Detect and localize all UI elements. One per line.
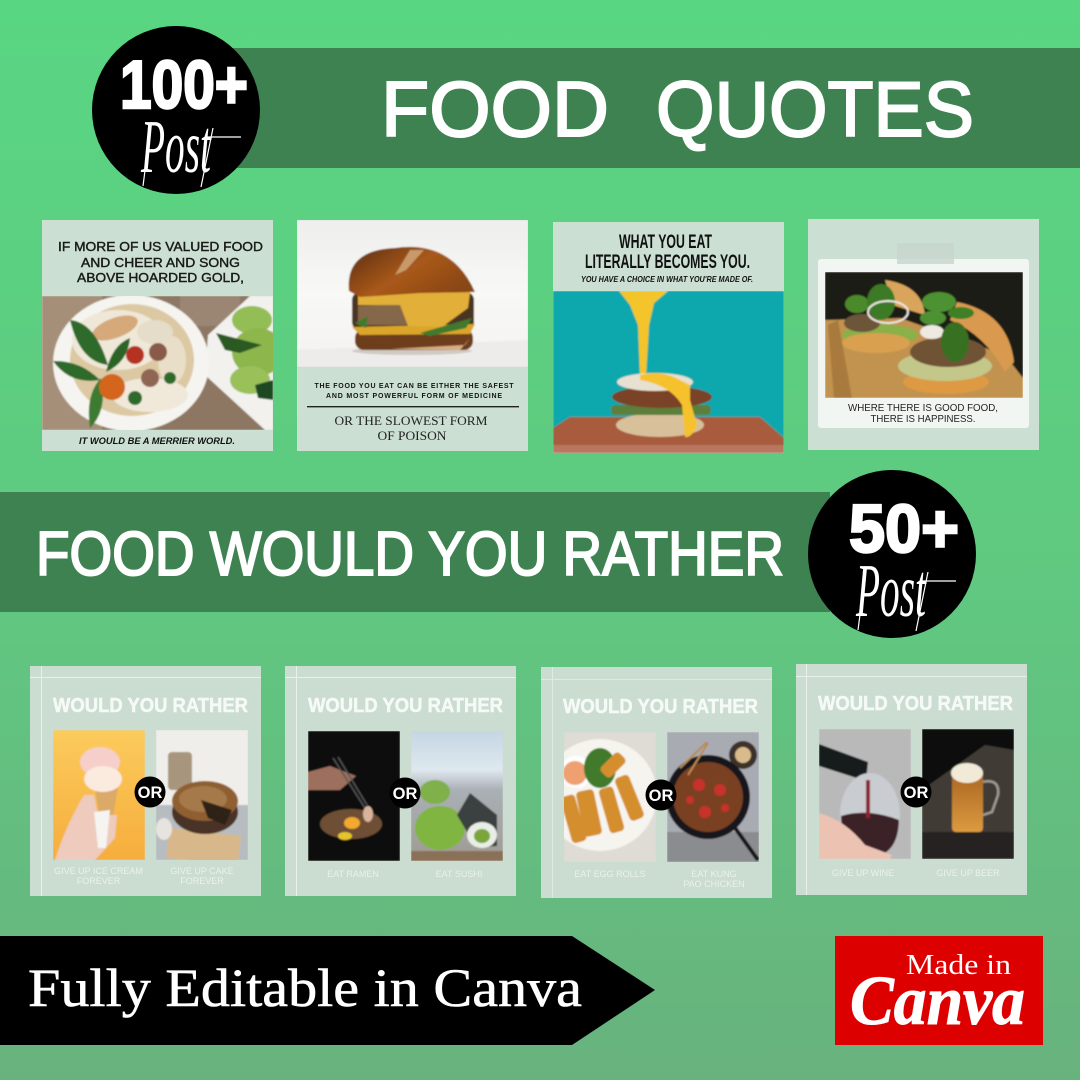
- or badge: OR: [138, 784, 162, 802]
- quote text: AND CHEER AND SONG: [81, 255, 240, 270]
- labels: EAT SUSHI: [436, 869, 482, 879]
- heading: WOULD YOU RATHER: [308, 695, 504, 717]
- photo: beer: [922, 729, 1014, 859]
- badge: 50+ post: Post: [855, 550, 927, 634]
- heading: WOULD YOU RATHER: [818, 693, 1014, 715]
- caption: IT WOULD BE A MERRIER WORLD.: [79, 436, 235, 447]
- caption: THERE IS HAPPINESS.: [870, 413, 976, 425]
- photo: burger on board: [553, 291, 784, 453]
- quote text: ABOVE HOARDED GOLD,: [77, 270, 244, 285]
- heading: WOULD YOU RATHER: [563, 696, 759, 718]
- or badge: OR: [904, 784, 928, 802]
- panel: quote card polaroid: [808, 219, 1039, 450]
- panel: quote card soup: [42, 220, 284, 451]
- labels: EAT EGG ROLLS: [574, 869, 646, 879]
- quote heading: LITERALLY BECOMES YOU.: [585, 252, 750, 273]
- photo: ice cream: [53, 730, 145, 860]
- photo: ramen: [308, 731, 400, 861]
- labels: GIVE UP ICE CREAM: [54, 866, 143, 876]
- labels: [574, 869, 745, 889]
- photo: egg rolls: [564, 732, 656, 862]
- title: food quotes: [381, 65, 974, 153]
- or badge: OR: [649, 787, 673, 805]
- quote heading: WHAT YOU EAT: [619, 232, 712, 253]
- polaroid frame: [818, 259, 1029, 428]
- caption: WHERE THERE IS GOOD FOOD,: [848, 402, 998, 414]
- arrow banner: fully editable in canva: Fully Editable in Canva: [28, 958, 582, 1018]
- quote text serif: [334, 414, 488, 443]
- or badge: [900, 776, 932, 808]
- quote text: [314, 383, 514, 400]
- banner: food would you rather: [0, 492, 830, 612]
- quote heading: YOU HAVE A CHOICE IN WHAT YOU'RE MADE OF.: [581, 275, 753, 284]
- badge: 100+ post: Post: [140, 106, 212, 190]
- quote text: AND MOST POWERFUL FORM OF MEDICINE: [326, 393, 502, 400]
- labels: GIVE UP BEER: [936, 868, 1000, 878]
- photo: pretzel burger: [297, 220, 528, 367]
- labels: [832, 868, 1000, 878]
- quote text: THE FOOD YOU EAT CAN BE EITHER THE SAFEST: [314, 383, 514, 390]
- banner: food quotes: [230, 48, 1080, 168]
- or badge: OR: [393, 785, 417, 803]
- or badge: [646, 780, 676, 810]
- labels: EAT RAMEN: [327, 869, 379, 879]
- badge: made in canva: Canva: [850, 963, 1025, 1040]
- quote heading: [581, 232, 753, 284]
- photo: noodle soup: [42, 296, 273, 430]
- photo: two burgers: [825, 272, 1023, 398]
- photo: kung pao chicken: [667, 732, 759, 862]
- quote text serif: OR THE SLOWEST FORM: [334, 414, 488, 428]
- labels: PAO CHICKEN: [683, 879, 745, 889]
- caption: [848, 402, 998, 425]
- or badge: [134, 776, 166, 808]
- heading: WOULD YOU RATHER: [53, 695, 249, 717]
- badge: 50+ post: 50+: [849, 491, 959, 567]
- panel: wine or beer: [796, 664, 1027, 895]
- labels: [54, 866, 234, 886]
- quote text serif: OF POISON: [378, 429, 446, 443]
- labels: GIVE UP CAKE: [170, 866, 234, 876]
- badge: made in canva: Made in: [906, 949, 1012, 981]
- badge: 100+ post: [92, 26, 260, 194]
- panel: quote card burger: [297, 220, 528, 451]
- title: food would you rather: FOOD WOULD YOU RATHER: [36, 520, 784, 589]
- quote text: [58, 239, 263, 285]
- or badge: [390, 778, 420, 808]
- arrow banner: fully editable in canva: [0, 936, 655, 1045]
- labels: FOREVER: [77, 876, 121, 886]
- panel: quote card pouring sauce: [553, 222, 784, 453]
- photo: sushi: [411, 731, 503, 861]
- panel: egg rolls or kung pao chicken: [541, 667, 772, 898]
- badge: 100+ post: 100+: [120, 47, 248, 123]
- panel: ramen or sushi: [285, 666, 516, 896]
- photo: cake: [156, 730, 248, 860]
- tape: [897, 243, 954, 264]
- labels: EAT KUNG: [691, 869, 737, 879]
- badge: 50+ post: [808, 470, 976, 638]
- panel: ice cream or cake: [30, 666, 261, 896]
- labels: GIVE UP WINE: [832, 868, 894, 878]
- title: food quotes: QUOTES: [656, 65, 974, 153]
- quote text: IF MORE OF US VALUED FOOD: [58, 239, 263, 254]
- labels: FOREVER: [180, 876, 224, 886]
- photo: wine: [819, 729, 911, 859]
- badge: made in canva: [835, 936, 1043, 1045]
- labels: [327, 869, 482, 879]
- title: food quotes: FOOD: [381, 65, 609, 153]
